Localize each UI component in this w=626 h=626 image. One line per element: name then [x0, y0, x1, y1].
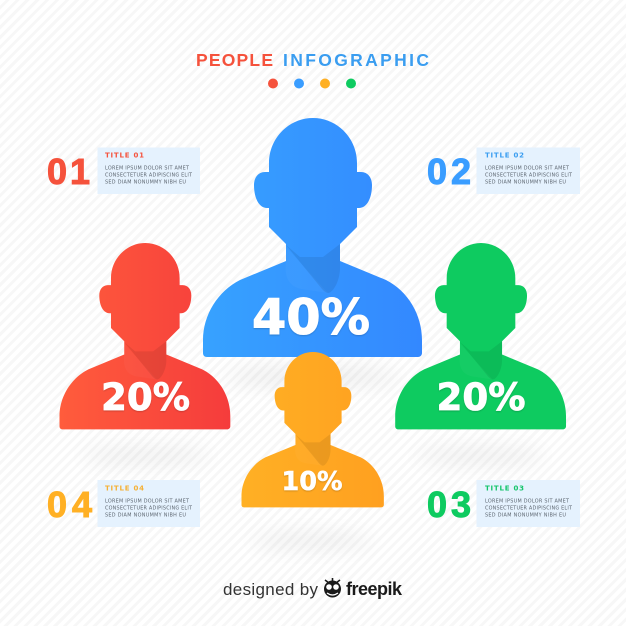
person: green 20%: [395, 243, 566, 429]
text box 02: SED DIAM NONUMMY NIBH EU: [485, 180, 566, 186]
text box 02: TITLE 02: [485, 152, 524, 160]
designed by text: designed by: [223, 580, 318, 599]
icon: freepik logo: [324, 578, 341, 598]
percentage red 20%: 20%: [101, 376, 190, 419]
number 02: 02: [427, 151, 471, 192]
person: blue 40%: [203, 118, 422, 357]
item 04: [47, 480, 200, 527]
number 01: 01: [47, 151, 90, 192]
text box 03: [476, 480, 580, 527]
text box 02: [476, 148, 580, 194]
text box 01: CONSECTETUER ADIPISCING ELIT: [105, 172, 192, 178]
footer credit: [223, 578, 403, 599]
text box 04: [98, 480, 200, 527]
title: [196, 50, 429, 70]
text box 04: SED DIAM NONUMMY NIBH EU: [105, 512, 186, 518]
text box 03: SED DIAM NONUMMY NIBH EU: [485, 512, 566, 518]
person: yellow 10%: [242, 352, 384, 507]
text box 02: LOREM IPSUM DOLOR SIT AMET: [485, 166, 569, 172]
text box 04: LOREM IPSUM DOLOR SIT AMET: [105, 498, 189, 504]
text box 01: SED DIAM NONUMMY NIBH EU: [105, 180, 186, 186]
freepik wordmark: freepik: [346, 579, 403, 599]
title: PEOPLE: [196, 50, 273, 70]
title dots: [268, 78, 356, 88]
text box 04: TITLE 04: [105, 484, 144, 492]
text box 04: CONSECTETUER ADIPISCING ELIT: [105, 506, 192, 512]
item 01: [47, 148, 200, 194]
text box 01: TITLE 01: [105, 152, 144, 160]
item 03: [427, 480, 580, 527]
percentage green 20%: 20%: [436, 376, 526, 419]
text box 01: LOREM IPSUM DOLOR SIT AMET: [105, 166, 189, 172]
number 03: 03: [427, 484, 471, 525]
title: INFOGRAPHIC: [283, 50, 429, 70]
percentage 40%: 40%: [252, 289, 370, 346]
text box 02: CONSECTETUER ADIPISCING ELIT: [485, 172, 572, 178]
number 04: 04: [47, 484, 92, 525]
text box 03: TITLE 03: [485, 484, 524, 492]
person: red 20%: [60, 243, 230, 429]
text box 01: [98, 148, 200, 194]
item 02: [427, 148, 580, 194]
ground shadows: [80, 368, 546, 548]
text box 03: LOREM IPSUM DOLOR SIT AMET: [485, 498, 569, 504]
percentage 10%: 10%: [282, 467, 342, 497]
text box 03: CONSECTETUER ADIPISCING ELIT: [485, 506, 572, 512]
